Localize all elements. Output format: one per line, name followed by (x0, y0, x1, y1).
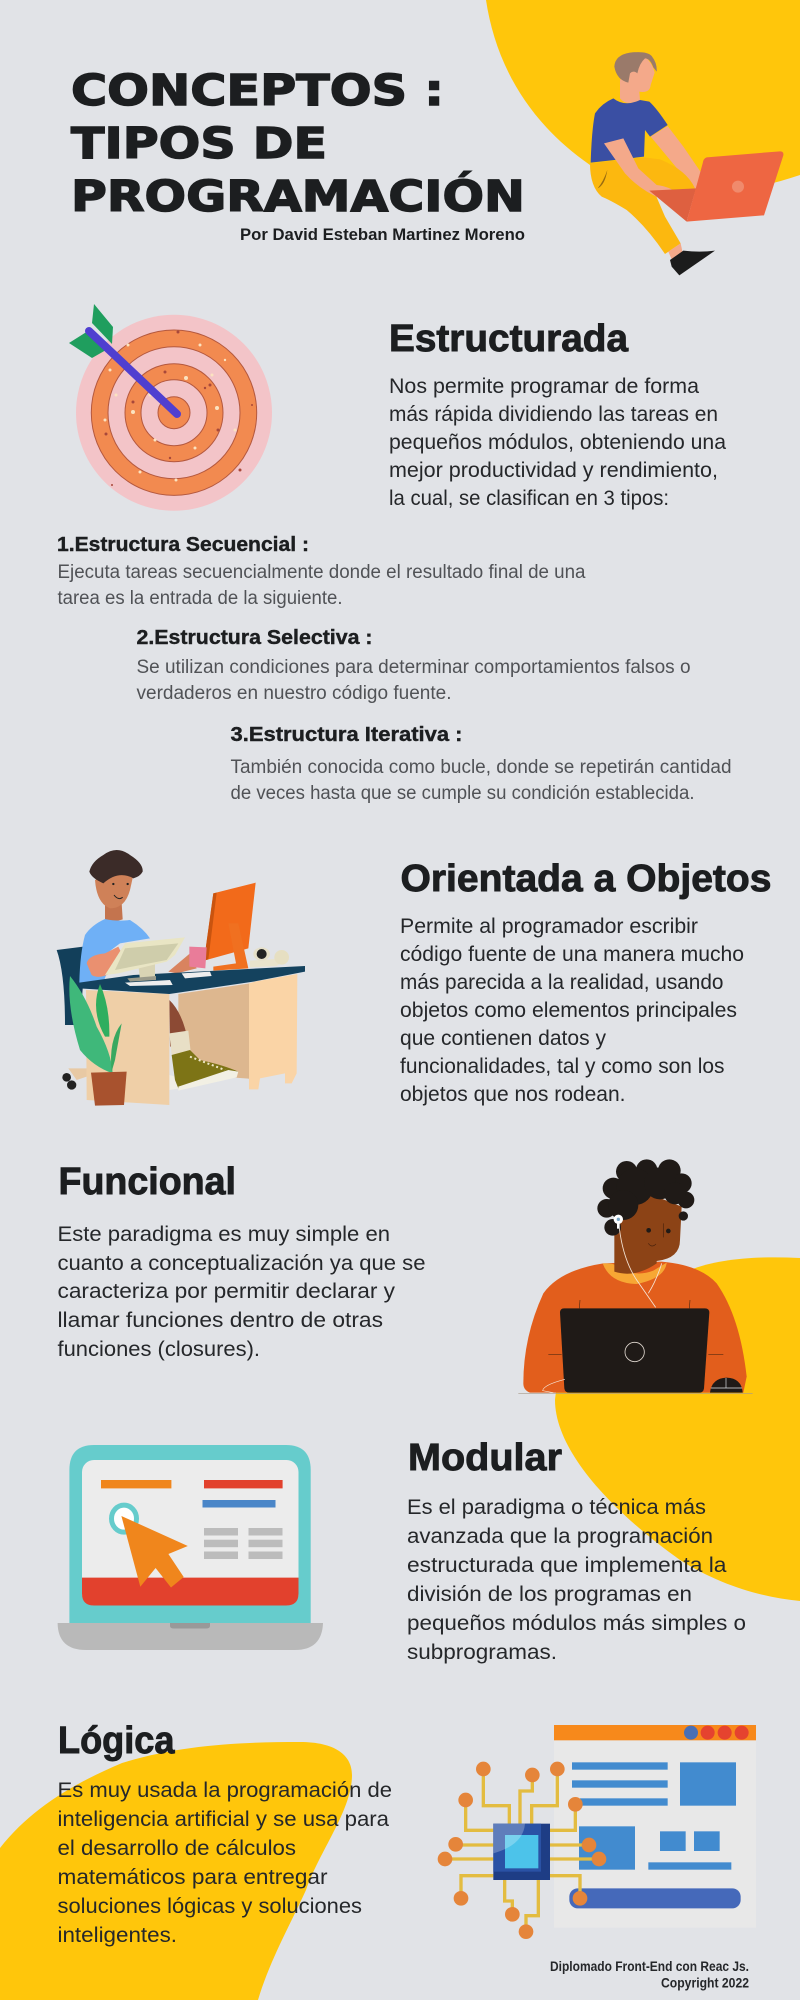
text block: Orientada a Objetos description: código fuente de una manera mucho (400, 942, 744, 966)
illustration: microchip and web page (438, 1725, 756, 1939)
text block: Estructura Iterativa (230, 724, 732, 804)
title: TIPOS DE (71, 119, 327, 169)
text block: Orientada a Objetos description: Permite al programador escribir (400, 914, 698, 938)
text block: Funcional description: cuanto a conceptualización ya que se (58, 1251, 426, 1275)
text block: Estructurada description: Nos permite programar de forma (389, 374, 699, 398)
text block: Orientada a Objetos description: objetos que nos rodean. (400, 1082, 626, 1106)
text block: Lógica description: Es muy usada la programación de (58, 1778, 392, 1802)
heading: Lógica: Lógica (58, 1720, 175, 1762)
yellow blob: bottom left (0, 1742, 352, 2000)
text block: Estructurada description (389, 374, 726, 510)
panel: Modular (407, 1437, 746, 1664)
panel: Lógica (58, 1720, 392, 1947)
title: CONCEPTOS : (71, 66, 444, 116)
text block: Estructura Iterativa: 3.Estructura Iterativa : (230, 724, 462, 746)
title: PROGRAMACIÓN (71, 171, 525, 222)
text block: Estructura Selectiva (136, 627, 690, 704)
text block: Funcional description (58, 1222, 426, 1361)
text block: Lógica description: el desarrollo de cálculos (58, 1836, 296, 1860)
text block: Orientada a Objetos description: objetos como elementos principales (400, 998, 737, 1022)
text block: Lógica description (58, 1778, 392, 1947)
text block: Estructura Secuencial: 1.Estructura Secuencial : (57, 534, 309, 556)
yellow blob: right middle (555, 1257, 800, 1601)
text block: Modular description: estructurada que implementa la (407, 1553, 727, 1577)
text block: Modular description (407, 1495, 746, 1664)
text block: Estructura Secuencial: Ejecuta tareas secuencialmente donde el resultado final de una (58, 562, 586, 583)
text block: Lógica description: soluciones lógicas y soluciones (58, 1894, 362, 1918)
text block: Modular description: Es el paradigma o técnica más (407, 1495, 706, 1519)
text block: Modular description: avanzada que la programación (407, 1524, 713, 1548)
text block: Estructura Iterativa: de veces hasta que se cumple su condición establecida. (230, 783, 694, 804)
heading: Funcional: Funcional (58, 1161, 236, 1203)
text block: Orientada a Objetos description: funcionalidades, tal y como son los (400, 1054, 724, 1078)
heading: Orientada a Objetos: Orientada a Objetos (400, 858, 772, 900)
text block: Estructurada description: más rápida dividiendo las tareas en (389, 402, 718, 426)
illustration: person with earphones at laptop (518, 1159, 753, 1393)
heading: Modular: Modular (408, 1437, 562, 1479)
illustration: target with arrow (69, 304, 272, 511)
illustration: man with laptop (590, 52, 783, 275)
text block: Modular description: pequeños módulos más simples o (407, 1611, 746, 1635)
text block: Estructura Selectiva: 2.Estructura Selectiva : (136, 627, 372, 649)
footer credits: Diplomado Front-End con Reac Js. (550, 1959, 749, 1974)
text block: Funcional description: caracteriza por permitir declarar y (58, 1279, 395, 1303)
illustration: laptop with cursor (58, 1445, 323, 1650)
text block: Estructurada description: mejor productividad y rendimiento, (389, 458, 718, 482)
footer credits (550, 1959, 749, 1990)
text block: Lógica description: matemáticos para entregar (58, 1865, 328, 1889)
panel: Estructurada (389, 318, 726, 510)
text block: Funcional description: Este paradigma es muy simple en (58, 1222, 390, 1246)
subtitle: author: Por David Esteban Martinez Moreno (240, 226, 525, 244)
text block: Funcional description: funciones (closures). (58, 1337, 260, 1361)
heading: Estructurada: Estructurada (389, 318, 629, 360)
footer credits: Copyright 2022 (661, 1976, 749, 1990)
text block: Estructurada description: la cual, se clasifican en 3 tipos: (389, 486, 669, 510)
text block: Modular description: división de los programas en (407, 1582, 692, 1606)
text block: Orientada a Objetos description: más parecida a la realidad, usando (400, 970, 724, 994)
panel: Orientada a Objetos (400, 858, 772, 1106)
illustration: programmer at desk (57, 850, 305, 1106)
text block: Modular description: subprogramas. (407, 1640, 557, 1664)
text block: Orientada a Objetos description (400, 914, 744, 1106)
text block: Estructura Selectiva: Se utilizan condiciones para determinar comportamientos falsos o (136, 657, 690, 678)
text block: Estructurada description: pequeños módulos, obteniendo una (389, 430, 726, 454)
yellow blob: top right (486, 0, 800, 194)
text block: Estructura Secuencial (57, 534, 586, 609)
text block: Orientada a Objetos description: que contienen datos y (400, 1026, 606, 1050)
text block: Estructura Secuencial: tarea es la entrada de la siguiente. (58, 588, 342, 609)
text block: Funcional description: llamar funciones dentro de otras (58, 1308, 383, 1332)
text block: Lógica description: inteligencia artificial y se usa para (58, 1807, 389, 1831)
title (71, 66, 525, 222)
panel: Funcional (58, 1161, 426, 1361)
text block: Estructura Iterativa: También conocida como bucle, donde se repetirán cantidad (230, 757, 732, 778)
text block: Lógica description: inteligentes. (58, 1923, 177, 1947)
text block: Estructura Selectiva: verdaderos en nuestro código fuente. (136, 683, 451, 704)
